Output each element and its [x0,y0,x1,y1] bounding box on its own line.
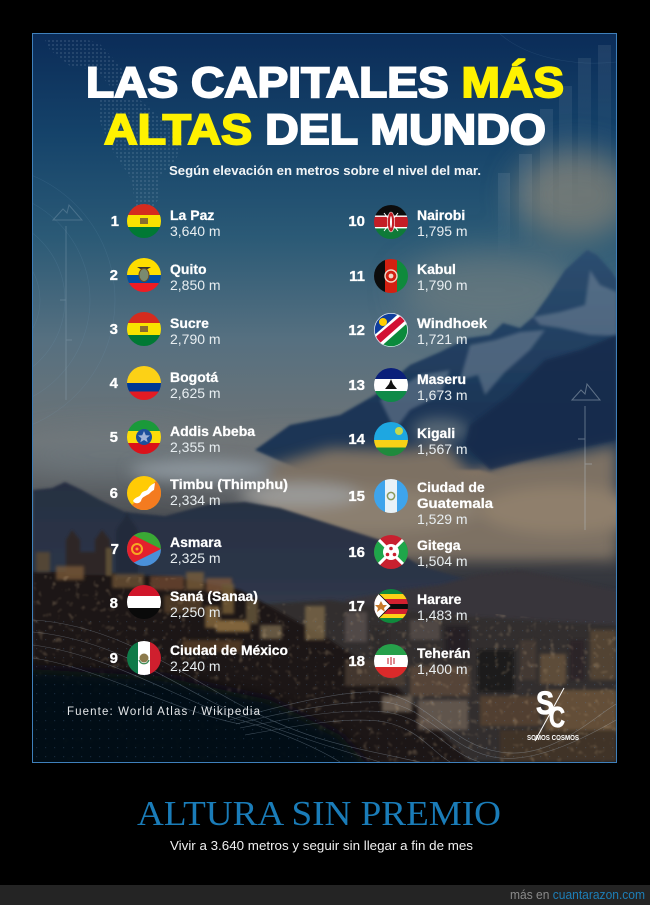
logo: Somos Cosmos: S [536,685,554,721]
row: Gitega: 16 [348,544,365,561]
row: Ciudad de Guatemala [348,479,493,527]
flag: Ecuador [127,258,161,292]
row: Timbu [110,476,288,510]
row: Addis Abeba: Addis Abeba [170,423,255,439]
subtitle: Según elevación en metros sobre el nivel del mar. [169,163,481,178]
row: La Paz: La Paz [170,207,214,223]
flag: Rwanda [374,422,408,456]
dark mountain core [465,335,617,470]
row: Ciudad de México: Ciudad de México [170,642,288,658]
row: Asmara: 7 [111,541,119,558]
row: Maseru: 13 [348,377,365,394]
row: Nairobi: Nairobi [417,207,465,223]
row: Nairobi: 10 [348,213,365,230]
background scene [33,34,616,762]
row: Asmara: 2,325 m [170,550,221,566]
dotted map [44,38,184,215]
row: Addis Abeba [110,420,255,455]
arc lines [0,34,616,435]
flag: Iran [374,644,408,678]
row: Maseru [348,368,468,403]
row: Timbu: 2,334 m [170,492,221,508]
flag: Kenya [374,205,408,239]
row: Saná: 8 [110,595,118,612]
flag: Afghanistan [374,259,408,293]
title: ALTAS DEL MUNDO [104,106,546,154]
warm clouds [44,132,616,496]
flowing wave lines [33,620,616,762]
flag: Bolivia [127,204,161,238]
row: La Paz: 1 [111,213,119,230]
row: Quito: 2,850 m [170,277,221,293]
row: Maseru: Maseru [417,371,466,387]
row: Windhoek: Windhoek [417,315,487,331]
row: Gitega: 1,504 m [417,553,468,569]
row: Teherán: Teherán [417,645,470,661]
row: Windhoek: 12 [348,322,365,339]
row: Kigali: Kigali [417,425,455,441]
row: Kabul: 1,790 m [417,277,468,293]
row: Kigali: 1,567 m [417,441,468,457]
row: Kabul: Kabul [417,261,456,277]
row: La Paz: 3,640 m [170,223,221,239]
flag: Lesotho [374,368,408,402]
clouds over mountain base [130,418,640,560]
row: Bogotá: Bogotá [170,369,218,385]
row: Ciudad de Guatemala: 1,529 m [417,511,468,527]
city light speckle [33,570,616,762]
row: Teherán: 18 [348,653,365,670]
row: Saná: Saná (Sanaa) [170,588,258,604]
flag: Mexico [127,641,161,675]
flag: Guatemala [374,479,408,513]
dark foot shade [33,664,370,762]
flag: Eritrea [127,532,161,566]
row: Quito: 2 [110,267,118,284]
logo: Somos Cosmos: C [549,702,565,734]
flag: Zimbabwe [374,589,408,623]
snow on mountain [380,270,617,430]
caption text: Vivir a 3.640 metros y seguir sin llegar a fin de mes [170,838,473,853]
flag: Bolivia [127,312,161,346]
row: Windhoek: 1,721 m [417,331,468,347]
row: Ciudad de Guatemala: 15 [348,488,365,505]
row: Harare: Harare [417,591,462,607]
panel border [32,34,616,762]
row: Addis Abeba: 2,355 m [170,439,221,455]
row: Bogotá: 2,625 m [170,385,221,401]
row: Bogotá [110,366,221,401]
row: Kabul [349,259,468,293]
row: Ciudad de México: 2,240 m [170,658,221,674]
row: Teherán: 1,400 m [417,661,468,677]
row: La Paz [111,204,221,239]
row: Saná [110,585,258,620]
flag: Burundi [374,535,408,569]
flag: Bhutan [127,476,161,510]
row: Ciudad de México [110,641,288,675]
row: Sucre: 3 [110,321,118,338]
row: Teherán [348,644,470,678]
flag: Colombia [127,366,161,400]
main mountain [255,250,617,520]
row: Ciudad de Guatemala: Guatemala [417,495,493,511]
row: Maseru: 1,673 m [417,387,468,403]
footer bar [0,885,650,905]
row: Kabul: 11 [349,268,365,285]
list: right column [348,205,493,678]
row: Addis Abeba: 5 [110,429,118,446]
rising bars [498,45,611,216]
row: Sucre [110,312,221,347]
row: Kigali [348,422,468,457]
row: Timbu: 6 [110,485,118,502]
right hills [347,579,616,625]
row: Sucre: 2,790 m [170,331,221,347]
cathedral [66,512,138,578]
footer bar: más en cuantarazon.com [510,888,645,902]
flag: Namibia [369,308,413,350]
list: left column [110,204,288,675]
flag: Yemen [127,585,161,619]
row: Ciudad de Guatemala: Ciudad de [417,479,485,495]
row: Timbu: Timbu (Thimphu) [170,476,288,492]
title: LAS CAPITALES MÁS [86,59,564,107]
panel: infographic [32,33,617,763]
caption heading: ALTURA SIN PREMIO [137,794,501,833]
distant mountains [33,480,458,659]
row: Quito: Quito [170,261,207,277]
mountain scale icon left [53,205,82,400]
row: Gitega: Gitega [417,537,461,553]
flag: Ethiopia [127,420,161,454]
row: Bogotá: 4 [110,375,119,392]
row: Nairobi: 1,795 m [417,223,468,239]
source note: Fuente: World Atlas / Wikipedia [67,706,261,718]
row: Sucre: Sucre [170,315,209,331]
row: Kigali: 14 [348,431,366,448]
row: Ciudad de México: 9 [110,650,118,667]
row: Asmara [111,532,222,566]
row: Nairobi [348,205,468,239]
row: Asmara: Asmara [170,534,222,550]
row: Harare: 17 [348,598,365,615]
left hillside [33,572,470,762]
logo: Somos Cosmos [527,685,579,742]
mountain scale icon right [572,384,600,530]
row: Harare [348,589,468,623]
row: Windhoek [348,308,487,350]
row: Gitega [348,535,468,569]
title [86,59,564,154]
row: Quito [110,258,221,293]
row: Saná: 2,250 m [170,604,221,620]
row: Harare: 1,483 m [417,607,468,623]
city buildings [36,552,617,762]
logo: Somos Cosmos: SOMOS COSMOS [527,735,579,742]
